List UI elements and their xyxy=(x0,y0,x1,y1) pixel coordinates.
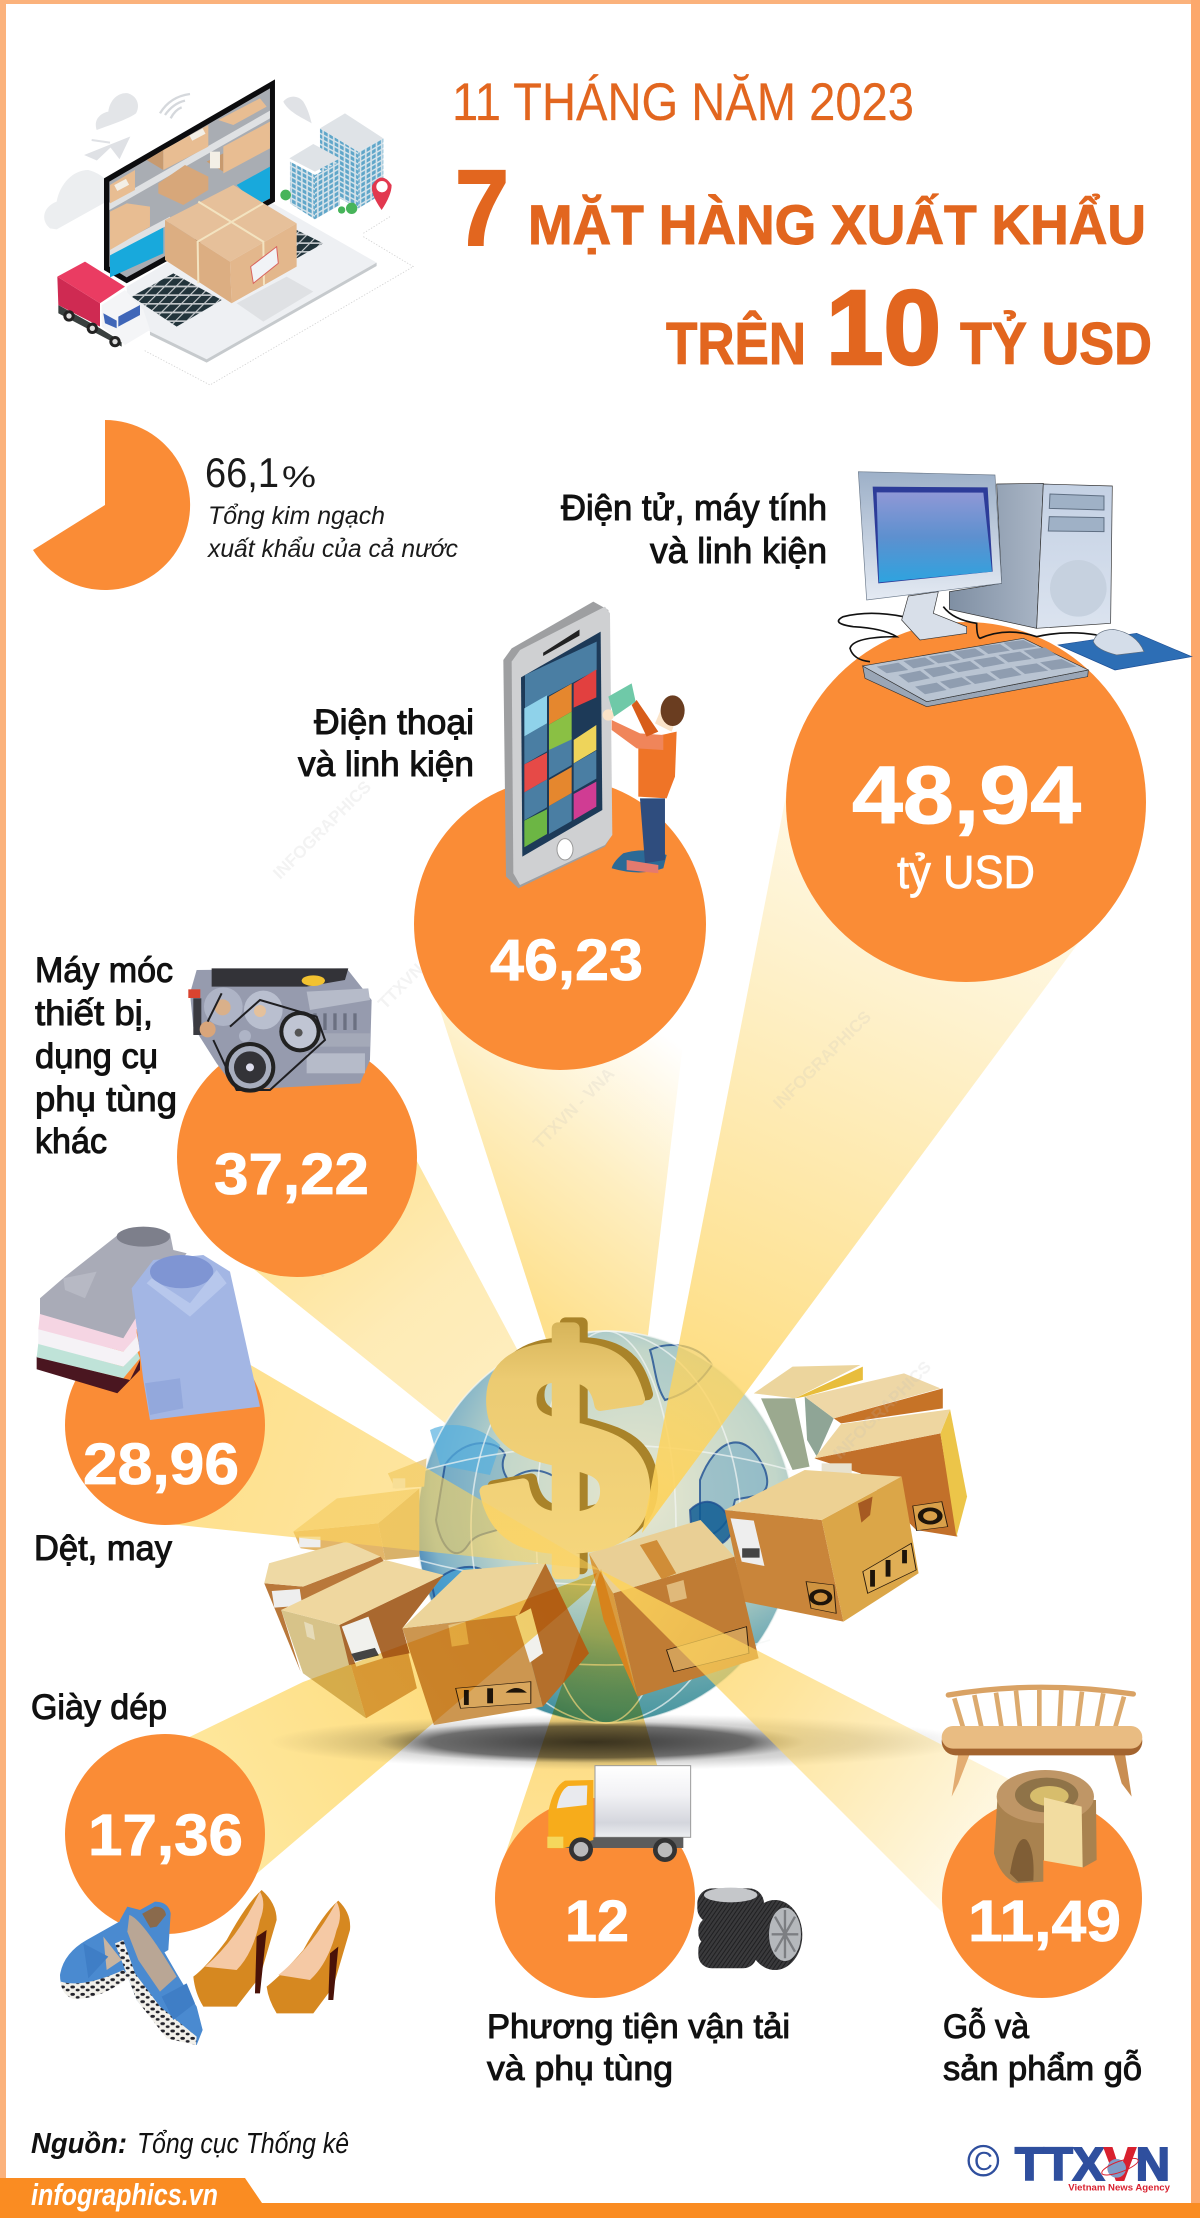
icon: desktop computer xyxy=(838,472,1192,707)
watermarks: TTXVN - VNA xyxy=(374,924,463,1013)
percentage: 66,1 xyxy=(205,449,279,496)
laptop screen xyxy=(104,79,275,283)
grey shirt stack xyxy=(37,1227,187,1393)
icon: gold dollar sign: $ xyxy=(482,1279,648,1615)
source note: Nguồn: xyxy=(31,2128,127,2160)
box right middle xyxy=(814,1409,967,1537)
pie chart xyxy=(33,420,190,590)
circle: electronics value: tỷ USD xyxy=(897,846,1035,898)
ray to textiles xyxy=(170,1350,600,1570)
label: machinery xyxy=(35,951,177,1161)
logo: TTXVN: C xyxy=(974,2146,993,2176)
share callout: 66,1% xyxy=(33,420,458,590)
icons: truck and tyres xyxy=(547,1766,802,1970)
engine xyxy=(188,968,372,1093)
label: vehicles: Phương tiện vận tải xyxy=(487,2008,790,2046)
circle: vehicles value: 12 xyxy=(565,1889,629,1954)
light rays over the globe xyxy=(170,780,1088,1935)
watermarks: TTXVN - VNA xyxy=(309,1194,398,1283)
label: footwear: Giày dép xyxy=(31,1688,167,1727)
label: wood: sản phẩm gỗ xyxy=(943,2050,1142,2088)
watermarks: TTXVN - VNA xyxy=(529,1064,618,1153)
source note: Tổng cục Thống kê xyxy=(137,2128,349,2160)
phone xyxy=(503,602,612,888)
caption: xuất khẩu của cả nước xyxy=(207,535,458,563)
label: electronics: Điện tử, máy tính xyxy=(561,487,827,528)
dotted measurement lines xyxy=(143,217,413,385)
icons: engine and shirts xyxy=(37,968,372,1420)
caption xyxy=(207,502,458,563)
label: machinery: thiết bị, xyxy=(35,994,153,1033)
high heels xyxy=(193,1890,350,2013)
label: vehicles xyxy=(487,2008,790,2088)
title xyxy=(452,73,1152,387)
headline line two: 10 xyxy=(826,269,941,387)
buildings xyxy=(289,113,383,219)
bench xyxy=(942,1687,1142,1797)
icons: bench and tree stump xyxy=(942,1687,1142,1883)
continents xyxy=(432,1345,767,1625)
ray to phones xyxy=(432,985,690,1569)
laptop deck xyxy=(127,202,377,363)
headline line two xyxy=(666,269,1152,387)
label: phones: Điện thoại xyxy=(314,703,474,742)
box right front xyxy=(725,1470,919,1622)
person xyxy=(603,683,685,873)
circle: machinery value: 37,22 xyxy=(214,1142,369,1207)
ray to footwear xyxy=(175,1573,597,1888)
footer band xyxy=(0,2177,1200,2218)
tyres xyxy=(697,1888,802,1970)
circle: phones value: 46,23 xyxy=(490,928,643,993)
circle: wood value: 11,49 xyxy=(968,1889,1121,1954)
circle: textiles background xyxy=(65,1325,265,1525)
label: phones: và linh kiện xyxy=(298,745,474,784)
globe xyxy=(417,1331,795,1723)
delivery truck xyxy=(57,262,150,347)
circle: footwear value: 17,36 xyxy=(88,1803,243,1868)
icon: gold dollar sign: $ xyxy=(490,1274,656,1610)
label: electronics: và linh kiện xyxy=(650,530,827,571)
box left small back xyxy=(388,1458,427,1488)
label: machinery: dụng cụ xyxy=(35,1037,158,1076)
light rays behind the globe xyxy=(240,985,690,1580)
box right top xyxy=(805,1373,943,1457)
clouds, plane and wifi xyxy=(44,93,312,229)
value: textiles: 28,96 xyxy=(83,1432,239,1497)
icon: shoes xyxy=(60,1890,350,2045)
label: machinery: Máy móc xyxy=(35,951,173,990)
label: electronics xyxy=(561,487,827,571)
footer band: infographics.vn xyxy=(31,2177,218,2212)
cardboard boxes around the globe xyxy=(264,1365,967,1725)
headline line two: TỶ USD xyxy=(960,310,1152,377)
ray to electronics xyxy=(642,780,1088,1533)
label: textiles: Dệt, may xyxy=(34,1529,172,1568)
circle: machinery value xyxy=(177,1037,417,1277)
label: wood: Gỗ và xyxy=(943,2008,1029,2046)
caption: Tổng kim ngạch xyxy=(208,502,385,530)
watermarks xyxy=(269,777,935,1463)
headline line one: MẶT HÀNG XUẤT KHẨU xyxy=(528,193,1146,256)
headline line one: 7 xyxy=(455,147,509,268)
icon: smartphone with person xyxy=(503,602,685,888)
label: vehicles: và phụ tùng xyxy=(487,2050,673,2088)
header illustration: laptop and parcels xyxy=(44,79,413,385)
label: phones xyxy=(298,703,474,784)
box left middle xyxy=(264,1542,385,1672)
watermarks: INFOGRAPHICS xyxy=(269,777,375,883)
ray to wood xyxy=(600,1570,1040,1935)
circle: phones value xyxy=(414,778,706,1070)
ray to vehicles xyxy=(500,1569,690,1880)
watermarks: INFOGRAPHICS xyxy=(829,1357,935,1463)
grid lines xyxy=(417,1331,795,1723)
box center left xyxy=(402,1563,589,1725)
share callout: 66,1%: % xyxy=(282,461,316,494)
label: wood xyxy=(943,2008,1142,2088)
box left upper xyxy=(293,1488,419,1560)
circle: footwear value xyxy=(65,1734,265,1934)
globe shadow xyxy=(270,1714,970,1770)
ray to machinery xyxy=(240,1150,640,1580)
subtitle: 11 THÁNG NĂM 2023 xyxy=(452,73,914,132)
watermarks: TTXVN - VNA xyxy=(799,794,888,883)
blue shirt xyxy=(132,1255,260,1420)
watermarks: INFOGRAPHICS xyxy=(589,847,695,953)
label: machinery: khác xyxy=(35,1122,107,1161)
circle: electronics value xyxy=(786,622,1146,982)
box far right back xyxy=(754,1365,863,1470)
headline line two: TRÊN xyxy=(666,310,806,377)
circle: vehicles value xyxy=(495,1798,695,1998)
source note xyxy=(31,2128,349,2160)
watermarks: INFOGRAPHICS xyxy=(769,1007,875,1113)
loafers xyxy=(60,1902,203,2045)
circle: wood value xyxy=(942,1798,1142,1998)
box left front xyxy=(281,1560,444,1718)
parcel xyxy=(165,185,297,303)
label: machinery: phụ tùng xyxy=(35,1080,177,1119)
stump xyxy=(994,1770,1097,1883)
circle: electronics value: 48,94 xyxy=(852,750,1081,841)
box center right xyxy=(589,1520,759,1697)
logo: TTXVN: Vietnam News Agency xyxy=(1068,2182,1171,2192)
logo: TTXVN: TTXVN xyxy=(1015,2138,1170,2190)
map pin and trees xyxy=(280,177,392,214)
truck xyxy=(547,1766,691,1862)
headline line one xyxy=(455,147,1146,268)
